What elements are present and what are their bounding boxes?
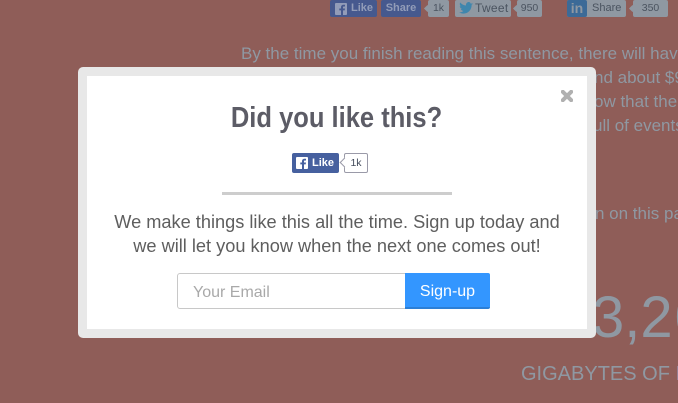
modal heading: Did you like this? <box>231 102 442 134</box>
twitter tweet button: Tweet <box>475 1 509 15</box>
twitter tweet button <box>455 0 511 17</box>
linkedin icon: in <box>571 0 583 16</box>
icon: twitter bird <box>459 2 473 14</box>
intro line 3: ow that the <box>594 92 677 111</box>
modal message <box>114 212 560 256</box>
facebook share count <box>428 0 449 17</box>
linkedin count: 350 <box>642 2 659 14</box>
modal white panel <box>87 76 587 329</box>
facebook like button <box>330 0 377 17</box>
modal dialog <box>78 67 596 338</box>
linkedin share button: Share <box>592 2 621 14</box>
like count: 1k <box>350 157 362 169</box>
modal message: We make things like this all the time. Sign up today and <box>114 212 560 232</box>
like button <box>292 153 339 173</box>
facebook like widget <box>292 153 368 173</box>
like count <box>344 153 368 173</box>
sign-up button <box>405 273 490 309</box>
facebook logo <box>296 157 308 169</box>
intro line 1: By the time you finish reading this sentence, there will have <box>241 44 678 63</box>
signup form <box>177 273 490 309</box>
sign-up button: Sign-up <box>420 283 475 300</box>
linkedin share button <box>567 0 626 17</box>
statistic caption: GIGABYTES OF I <box>521 363 678 385</box>
social share bar <box>330 0 668 17</box>
linkedin count <box>633 0 668 17</box>
facebook share button: Share <box>386 2 416 14</box>
facebook like button: Like <box>351 2 373 14</box>
intro paragraph <box>241 44 678 223</box>
close icon <box>561 90 573 102</box>
tweet count: 950 <box>521 2 538 14</box>
email input <box>177 273 406 309</box>
divider <box>222 192 452 195</box>
facebook share count: 1k <box>433 2 444 14</box>
like button: Like <box>312 157 334 169</box>
linkedin icon <box>567 0 587 17</box>
email input: Your Email <box>193 284 270 301</box>
modal message: we will let you know when the next one comes out! <box>133 236 541 256</box>
facebook share button <box>381 0 421 17</box>
icon: facebook small <box>335 3 347 15</box>
tweet count <box>517 0 542 17</box>
